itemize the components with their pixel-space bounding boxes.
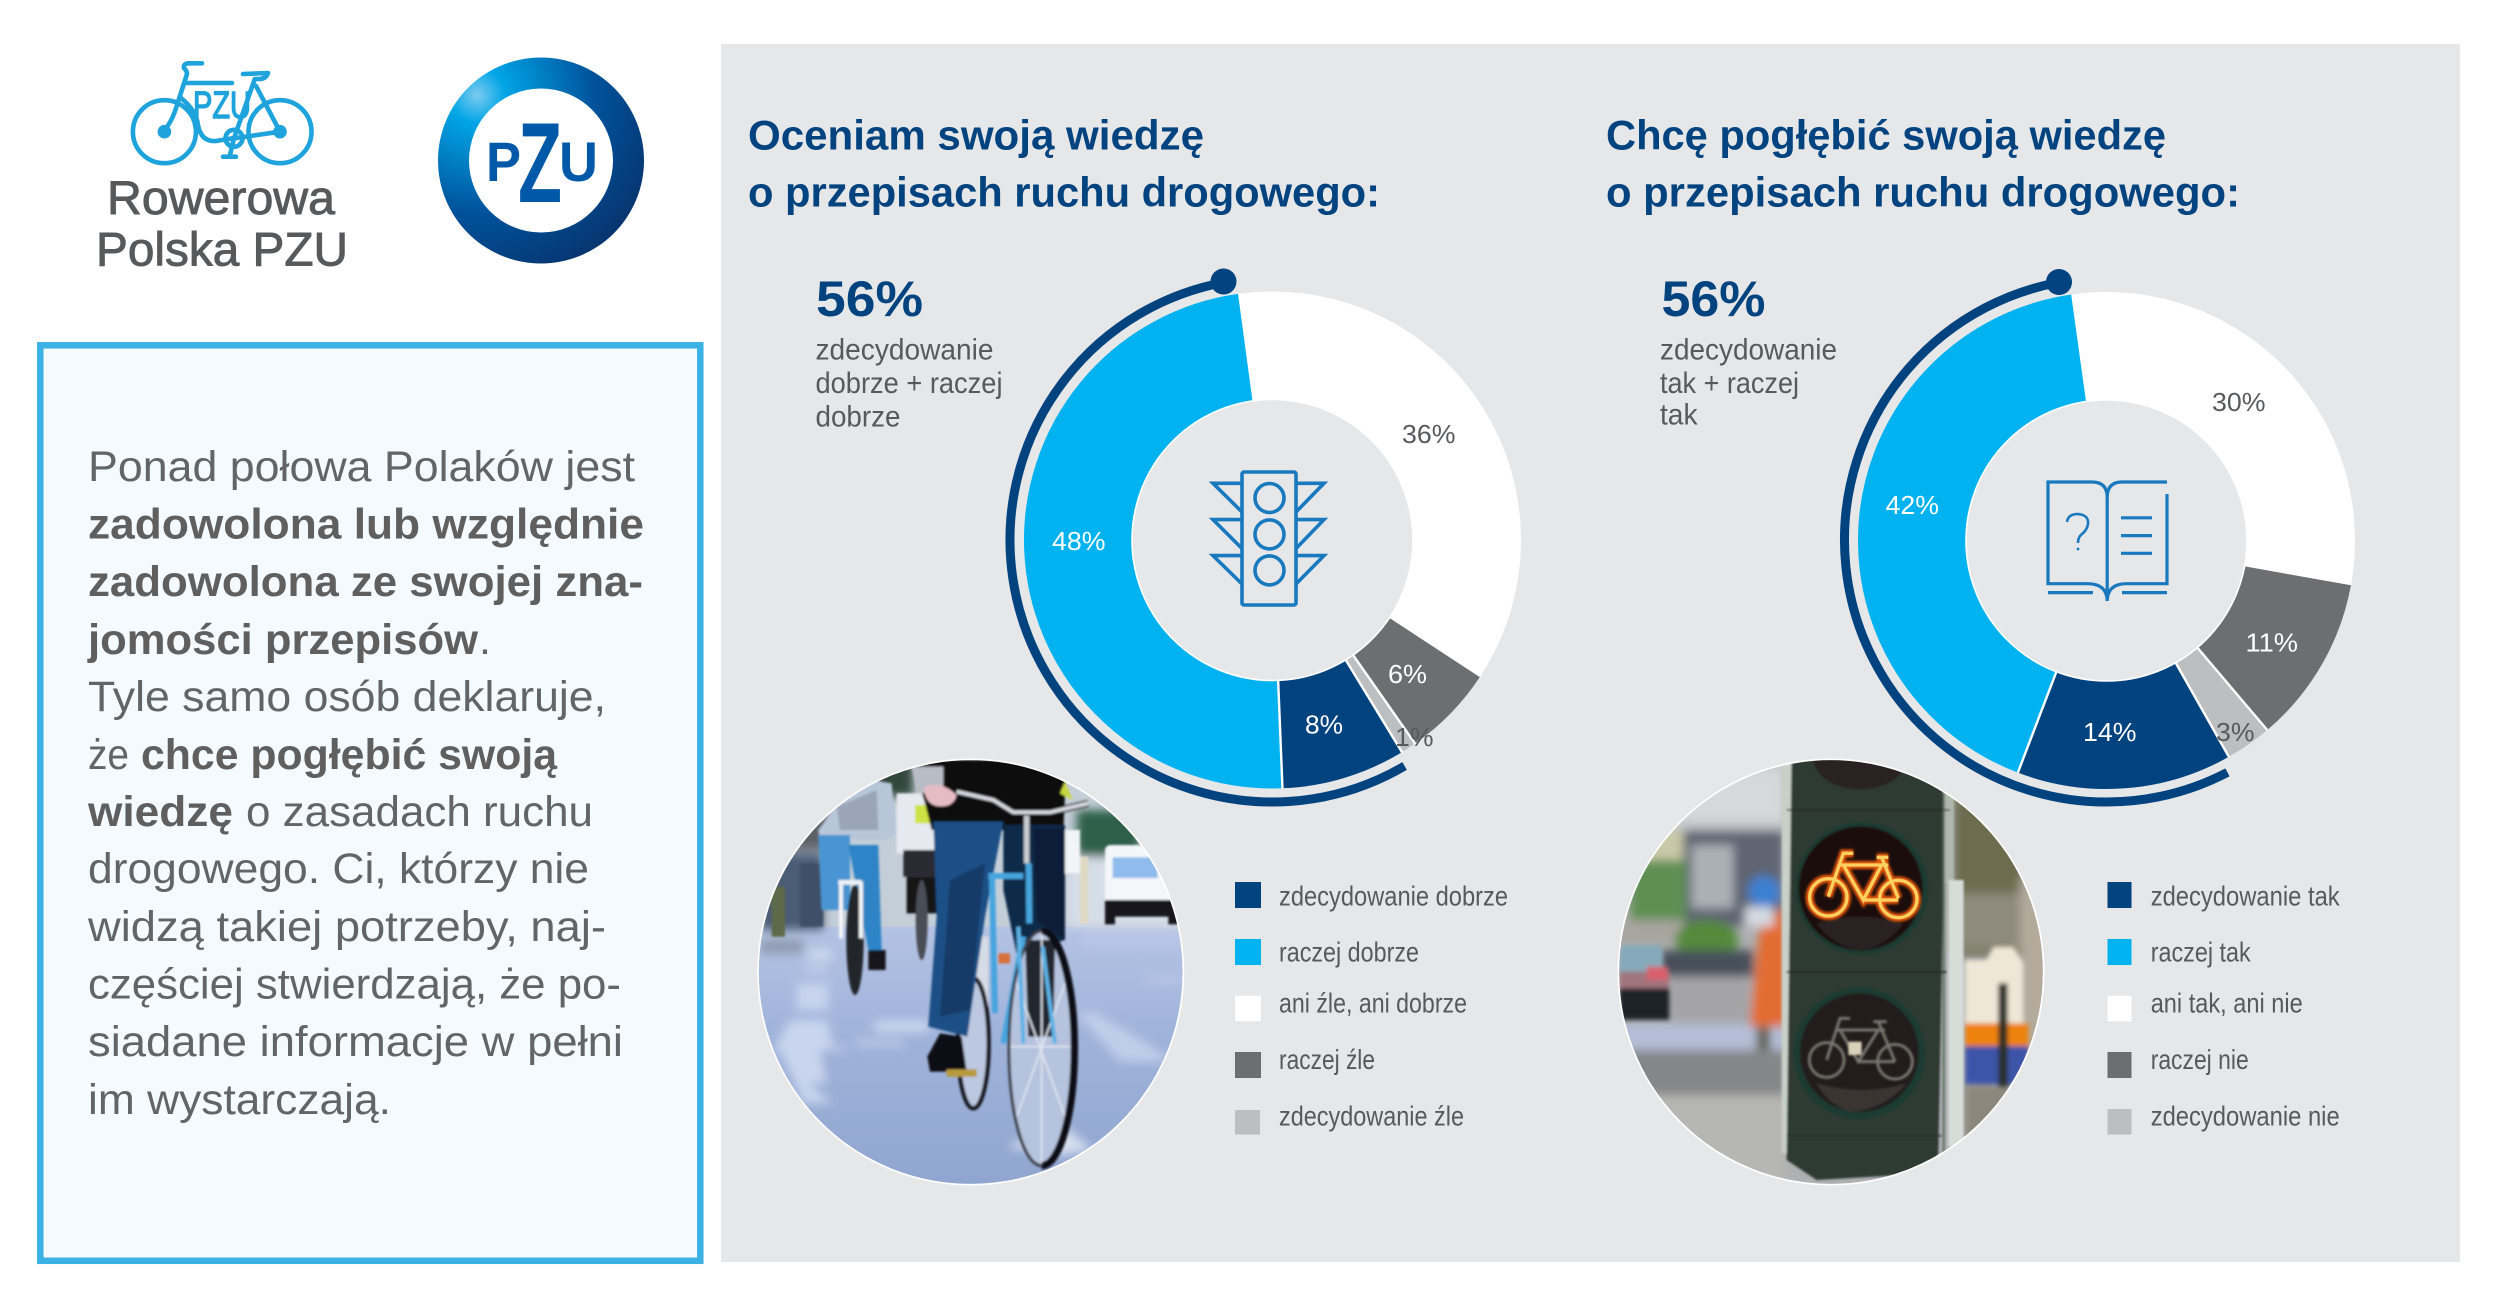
data labels: 42% <box>1886 490 1939 520</box>
heading: right chart: o przepisach ruchu drogowego: <box>1606 169 2240 216</box>
callout: right 56%: tak + raczej <box>1660 367 1799 400</box>
text block: summary: wiedzę <box>87 788 233 836</box>
legend: right chart: zdecydowanie nie <box>2151 1101 2340 1132</box>
data labels: 11% <box>2246 628 2298 658</box>
callout: left 56%: 56% <box>816 271 923 327</box>
data labels: 36% <box>1402 419 1456 449</box>
legend: right chart: ani tak, ani nie <box>2151 988 2303 1019</box>
signal housing <box>1787 750 1943 1180</box>
lit bicycle symbol <box>1810 853 1917 918</box>
legend: left chart: ani źle, ani dobrze <box>1279 988 1467 1019</box>
text block: summary <box>87 443 644 1124</box>
text block: summary: Ponad połowa Polaków jest <box>88 443 635 491</box>
text block: summary: zadowolona ze swojej zna- <box>88 558 643 606</box>
white van <box>1105 845 1170 908</box>
callout: right 56%: tak <box>1660 398 1698 432</box>
front wheel <box>1009 931 1074 1166</box>
icon: bicycle <box>133 63 312 163</box>
rear wheel <box>975 937 988 1023</box>
callout: right 56%: zdecydowanie <box>1660 334 1837 367</box>
heading: left chart <box>748 112 1380 216</box>
logo: PZU roundel: U <box>559 130 598 193</box>
chart: left donut <box>913 181 1631 899</box>
data labels: 6% <box>1388 659 1427 689</box>
bus <box>1965 947 2023 1025</box>
legend: right chart: raczej tak <box>2151 937 2252 968</box>
data labels <box>1886 387 2298 747</box>
text block: summary: o zasadach ruchu <box>246 788 593 836</box>
text block: summary: drogowego. Ci, którzy nie <box>88 845 589 893</box>
heading: right chart <box>1606 112 2240 216</box>
legend: left chart: raczej źle <box>1279 1044 1375 1075</box>
far riders <box>800 863 823 927</box>
callout: left 56%: dobrze + raczej <box>816 367 1002 400</box>
legend: left chart: zdecydowanie źle <box>1279 1101 1464 1132</box>
text block: summary: zadowolona lub względnie <box>88 500 644 548</box>
photo: bicycle traffic signal <box>1618 758 2044 1186</box>
logo: PZU roundel: P <box>486 130 521 193</box>
icon: traffic light <box>1213 472 1324 605</box>
poles <box>1782 763 1792 1153</box>
arc: 56% bracket <box>1753 187 2460 893</box>
left rider <box>818 780 897 840</box>
text block: summary: że <box>88 731 129 779</box>
icon: open book <box>2048 482 2167 601</box>
bike frame <box>988 863 1029 1043</box>
callout: right 56%: 56% <box>1662 271 1766 327</box>
callout: left 56%: dobrze <box>816 401 900 434</box>
lamps <box>1795 822 1928 955</box>
text block: summary: Tyle samo osób deklaruje, <box>88 673 606 721</box>
logo text: Polska PZU <box>96 223 348 276</box>
legend: left chart <box>1235 881 1508 1134</box>
legend: right chart: raczej nie <box>2151 1044 2249 1075</box>
legend: left chart: raczej dobrze <box>1279 937 1419 968</box>
parked car <box>1619 945 1663 975</box>
data labels: 8% <box>1305 710 1343 740</box>
text block: summary: siadane informacje w pełni <box>88 1018 623 1066</box>
heading: left chart: Oceniam swoją wiedzę <box>748 112 1204 158</box>
logo: PZU roundel: Z <box>518 100 562 227</box>
legend: right chart: zdecydowanie tak <box>2151 881 2341 912</box>
callout: right 56% <box>1660 271 1837 432</box>
logo text: Rowerowa <box>107 171 336 224</box>
photo: cyclists on a bike lane <box>757 758 1184 1186</box>
text block: summary: jomości przepisów <box>87 616 479 664</box>
logo text <box>96 171 348 276</box>
logo: Rowerowa Polska PZU <box>96 63 348 276</box>
callout: left 56% <box>816 271 1002 434</box>
logo: PZU roundel <box>438 58 644 264</box>
panel: summary text box <box>40 345 700 1261</box>
middle rider <box>897 793 937 853</box>
text block: summary: częściej stwierdzają, że po- <box>88 960 621 1008</box>
callout: left 56%: zdecydowanie <box>816 334 994 367</box>
data labels: 30% <box>2212 387 2266 417</box>
legend: left chart: zdecydowanie dobrze <box>1279 881 1508 912</box>
data labels <box>1052 419 1456 752</box>
panel: grey background <box>721 44 2460 1262</box>
chart: right donut <box>1753 187 2460 893</box>
icon: bicycle: PZU <box>193 85 251 127</box>
data labels: 48% <box>1052 526 1106 556</box>
text block: summary: im wystarczają. <box>88 1076 391 1124</box>
data labels: 14% <box>2083 717 2136 747</box>
legend: right chart <box>2108 881 2341 1134</box>
text block: summary: chce pogłębić swoją <box>141 731 558 779</box>
dark bicycle symbol <box>1809 1018 1912 1079</box>
arc: 56% bracket <box>913 181 1631 899</box>
data labels: 1% <box>1395 722 1434 752</box>
heading: left chart: o przepisach ruchu drogowego: <box>748 169 1380 216</box>
text block: summary: . <box>479 616 491 664</box>
text block: summary: widzą takiej potrzeby, naj- <box>87 903 606 951</box>
main rider <box>912 760 1067 830</box>
heading: right chart: Chcę pogłębić swoją wiedzę <box>1606 112 2166 158</box>
data labels: 3% <box>2216 717 2254 747</box>
